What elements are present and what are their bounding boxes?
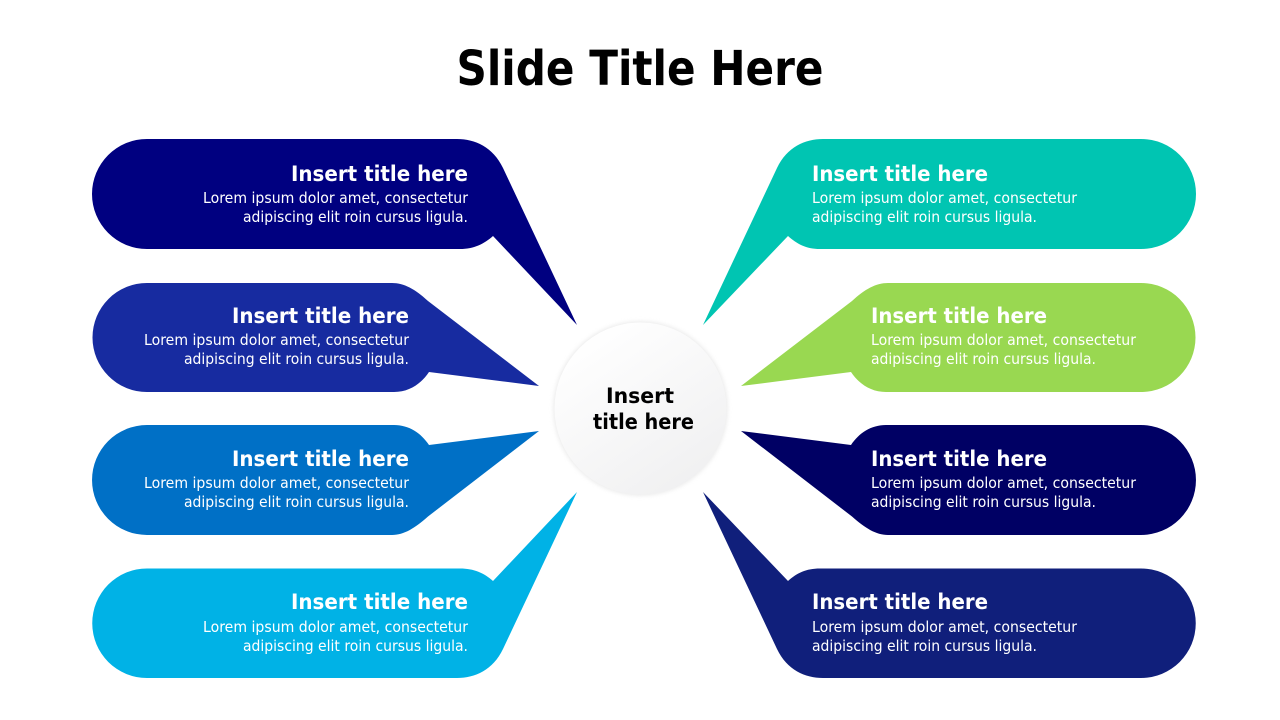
callout: left 4 (92, 492, 577, 678)
callout heading: left 4: Insert title here (291, 590, 468, 614)
callout text: right 4: adipiscing elit roin cursus ligula. (812, 637, 1037, 655)
callout: right 1 (703, 139, 1196, 325)
callout text: right 2: adipiscing elit roin cursus ligula. (871, 350, 1096, 368)
callout text: left 2: adipiscing elit roin cursus ligula. (184, 350, 409, 368)
callout heading: right 1: Insert title here (812, 162, 988, 186)
callout text: left 2: Lorem ipsum dolor amet, consectetur (144, 331, 410, 349)
callout: left 3 (92, 425, 539, 535)
callout text: right 3 (871, 474, 1137, 511)
callout text: right 4: Lorem ipsum dolor amet, consectetur (812, 618, 1078, 636)
callout text: right 3: Lorem ipsum dolor amet, consectetur (871, 474, 1137, 492)
callout text: right 4 (812, 618, 1078, 655)
callout text: left 3: Lorem ipsum dolor amet, consectetur (144, 474, 410, 492)
callout text: left 1 (203, 189, 469, 226)
callout text: right 1: adipiscing elit roin cursus ligula. (812, 208, 1037, 226)
callout text: right 1: Lorem ipsum dolor amet, consectetur (812, 189, 1078, 207)
callout: right 4 (703, 492, 1196, 678)
callout text: left 4: adipiscing elit roin cursus ligula. (243, 637, 468, 655)
callout text: right 1 (812, 189, 1078, 226)
callout text: right 3: adipiscing elit roin cursus ligula. (871, 493, 1096, 511)
callout heading: right 3: Insert title here (871, 447, 1047, 471)
callout: right 2 (741, 283, 1196, 392)
callout text: left 2 (144, 331, 410, 368)
callout: right 3 (741, 425, 1196, 535)
callout heading: left 1: Insert title here (291, 162, 468, 186)
callout text: left 4: Lorem ipsum dolor amet, consectetur (203, 618, 469, 636)
callout heading: left 2: Insert title here (232, 304, 409, 328)
callout text: left 4 (203, 618, 469, 655)
callout: left 1 (92, 139, 577, 325)
callout text: left 3: adipiscing elit roin cursus ligula. (184, 493, 409, 511)
callout heading: right 4: Insert title here (812, 590, 988, 614)
callout text: left 1: adipiscing elit roin cursus ligula. (243, 208, 468, 226)
title: Slide Title Here (456, 41, 824, 97)
center label: Insert (606, 384, 674, 408)
center circle (554, 322, 728, 496)
center label (593, 384, 694, 434)
callout text: left 1: Lorem ipsum dolor amet, consectetur (203, 189, 469, 207)
callout text: right 2: Lorem ipsum dolor amet, consectetur (871, 331, 1137, 349)
callout text: left 3 (144, 474, 410, 511)
callout heading: right 2: Insert title here (871, 304, 1047, 328)
callout heading: left 3: Insert title here (232, 447, 409, 471)
callout: left 2 (92, 283, 539, 392)
callout text: right 2 (871, 331, 1137, 368)
center label: title here (593, 410, 694, 434)
